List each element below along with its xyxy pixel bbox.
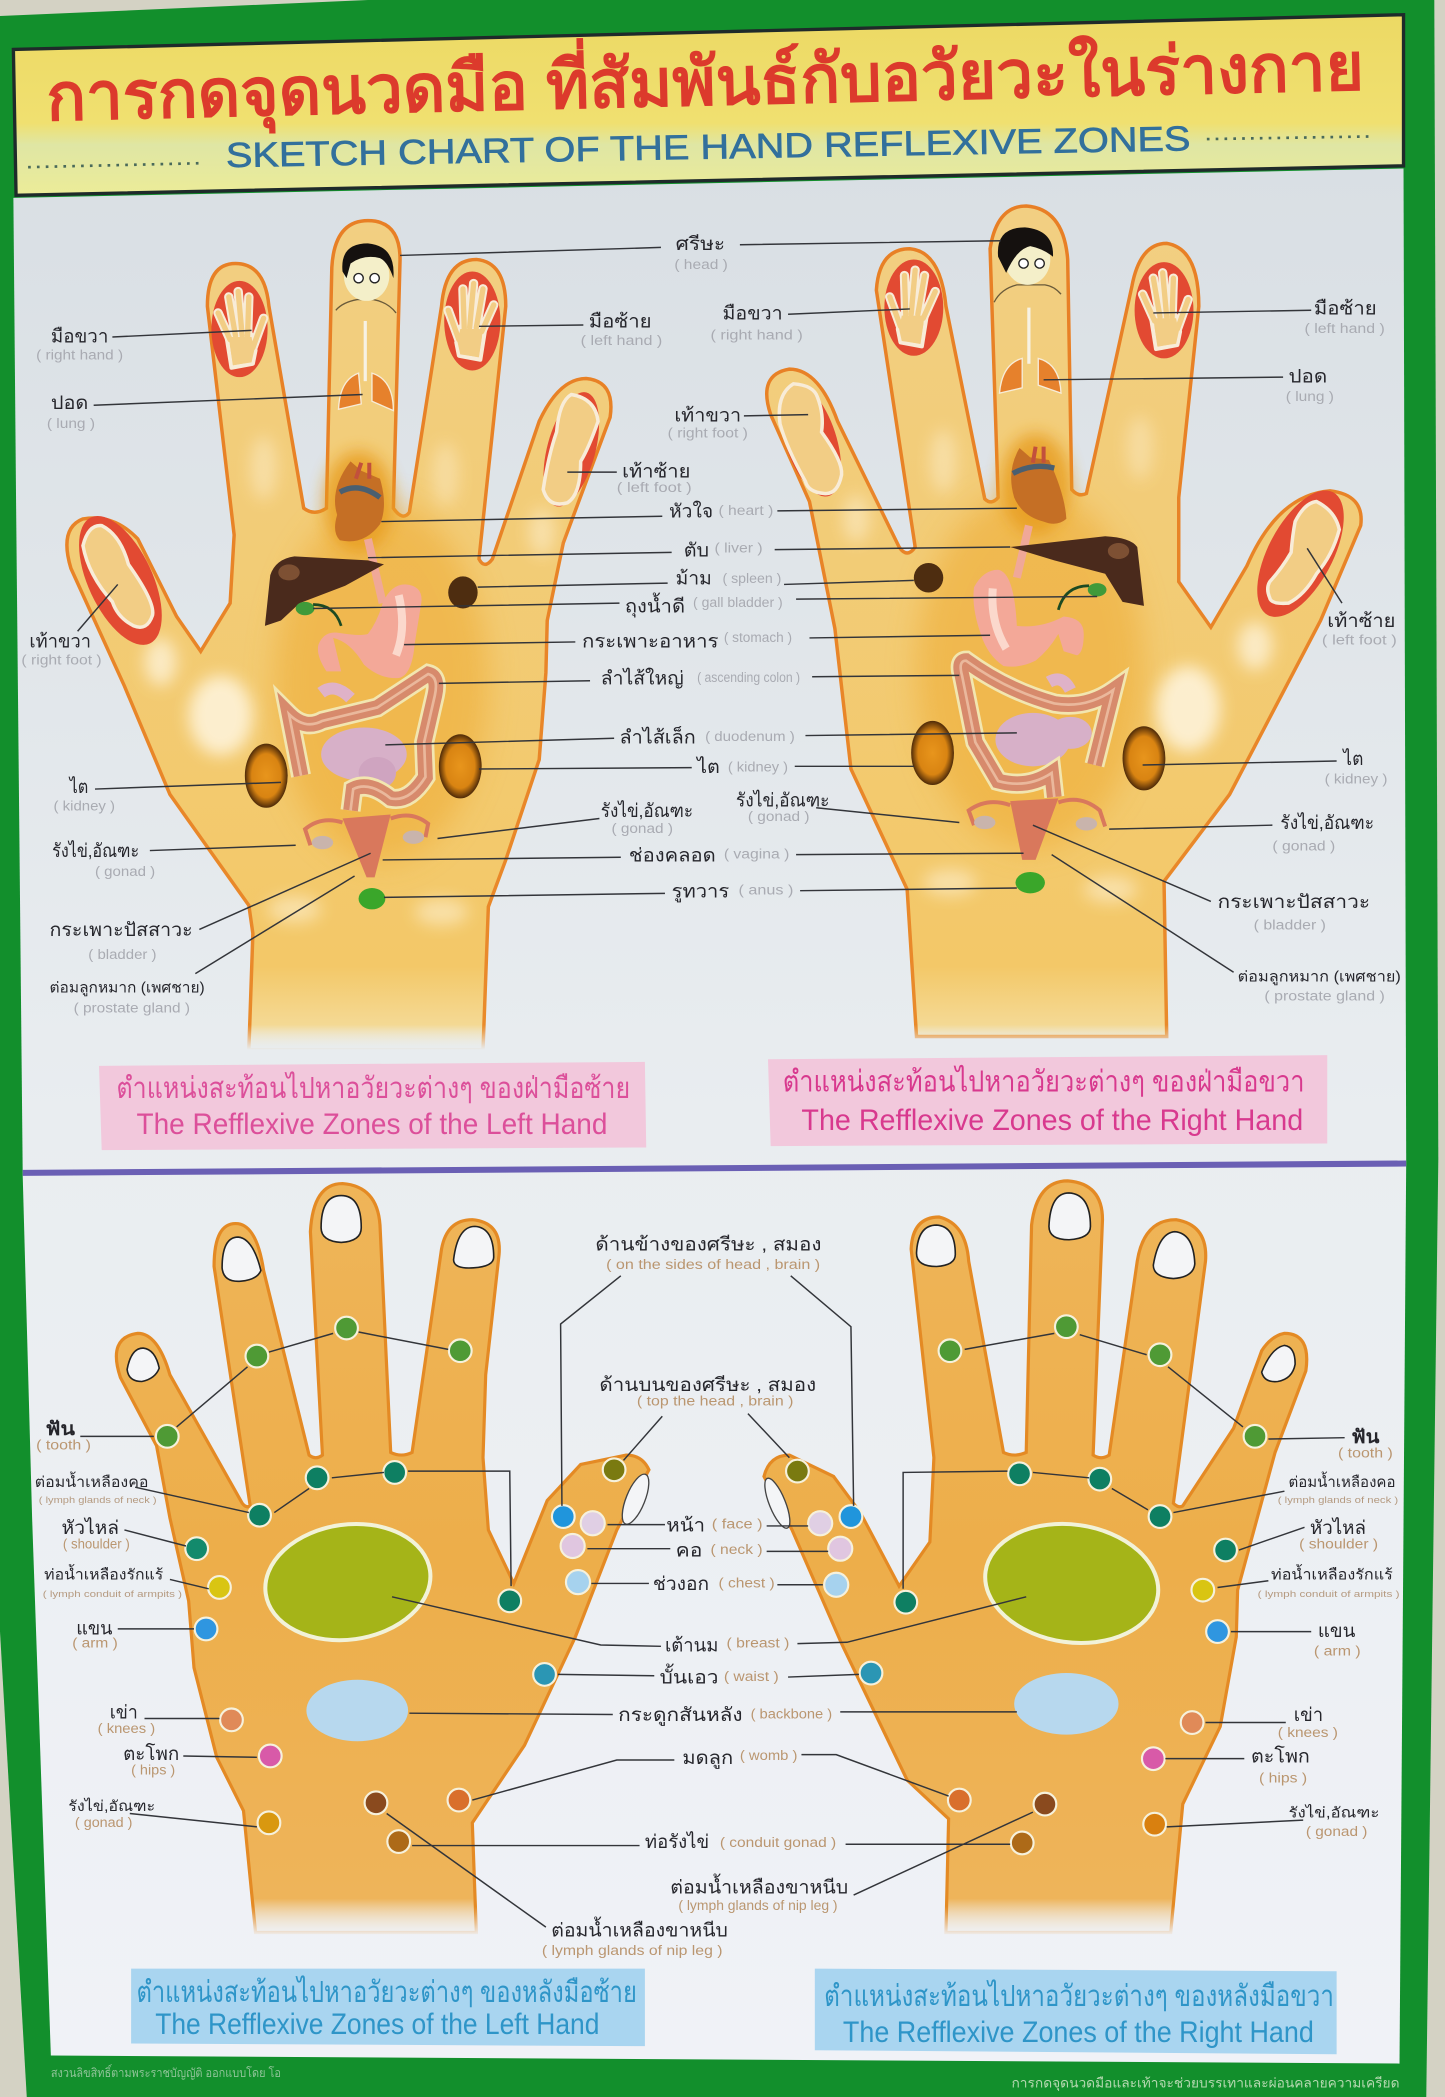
label: anus: รูทวาร <box>672 880 729 902</box>
label: knees <box>1206 1704 1338 1740</box>
label: face: ( face ) <box>712 1517 763 1532</box>
label: lymph glands of nip leg right <box>670 1812 1033 1913</box>
label: tooth: ( tooth ) <box>36 1438 91 1453</box>
label: face: หน้า <box>666 1514 705 1535</box>
label: gonad <box>52 840 296 879</box>
label: kidney: ไต <box>68 776 88 797</box>
leader lines and labels: top right hand <box>710 297 1401 1003</box>
purple divider <box>23 1164 1406 1173</box>
label: gall bladder: ( gall bladder ) <box>693 595 783 610</box>
label: gonad right: ( gonad ) <box>1272 839 1335 854</box>
label: right foot lower: เท้าขวา <box>29 630 91 651</box>
label: breast <box>392 1597 1026 1656</box>
label: lung: ปอด <box>51 392 88 413</box>
zone: breast <box>258 1514 438 1651</box>
label: lymph conduit of armpits <box>1218 1563 1400 1599</box>
label: vagina: ช่องคลอด <box>629 844 716 865</box>
label: gonad: ( gonad ) <box>75 1815 132 1830</box>
label: liver <box>368 539 1010 560</box>
label: gonad center: ( gonad ) <box>611 821 673 836</box>
label: gonad center <box>438 800 693 839</box>
icon: liver <box>1010 536 1144 606</box>
reflex points <box>156 1317 625 1853</box>
label: anus <box>384 880 1017 902</box>
label: conduit gonad <box>412 1831 1010 1852</box>
label: stomach: กระเพาะอาหาร <box>582 630 718 651</box>
icon: right foot on little finger <box>62 504 179 657</box>
label: bladder: กระเพาะปัสสาวะ <box>50 919 193 940</box>
label: gall bladder: ถุงน้ำดี <box>625 593 685 619</box>
icon: anus <box>359 888 385 909</box>
label: lymph conduit of armpits <box>43 1563 209 1599</box>
label: shoulder <box>62 1517 186 1552</box>
label: top of head, brain: ด้านบนของศรีษะ , สมอง <box>599 1374 816 1395</box>
label: prostate gland: ( prostate gland ) <box>1264 988 1385 1003</box>
label: neck <box>587 1540 828 1561</box>
label: left foot: เท้าซ้าย <box>622 460 690 481</box>
label: lymph glands of neck: ต่อมน้ำเหลืองคอ <box>35 1471 149 1491</box>
label: liver: ( liver ) <box>714 540 763 555</box>
icon: small intestine <box>321 688 407 789</box>
icon: gall bladder <box>1058 583 1106 610</box>
label: kidney: ( kidney ) <box>1325 772 1387 787</box>
label: tooth <box>36 1332 448 1453</box>
center labels between top hands <box>313 233 1097 902</box>
label: prostate gland: ( prostate gland ) <box>74 1000 190 1015</box>
icon: boy head <box>994 227 1061 364</box>
label: right hand <box>710 303 910 343</box>
icon: spleen <box>914 563 943 592</box>
label: lung <box>47 392 363 431</box>
label: gonad right: รังไข่,อัณฑะ <box>1280 812 1374 833</box>
label: knees <box>98 1702 219 1736</box>
label: left hand: มือซ้าย <box>589 311 652 332</box>
label: conduit gonad: ท่อรังไข่ <box>645 1831 709 1852</box>
label: knees: เข่า <box>110 1702 138 1723</box>
dotted rule right <box>1207 136 1374 139</box>
label: left foot <box>1307 548 1397 648</box>
hand: top right palm with organs <box>767 206 1362 1036</box>
label: duodenum: ลำไส้เล็ก <box>619 725 696 748</box>
label: breast: ( breast ) <box>727 1636 789 1651</box>
icon: uterus and ovaries <box>305 814 428 877</box>
label: lung: ( lung ) <box>1286 389 1334 404</box>
label: right hand: ( right hand ) <box>36 348 123 363</box>
label: ascending colon <box>439 668 959 690</box>
label: waist <box>558 1664 859 1688</box>
label: tooth <box>965 1333 1393 1461</box>
caption: right back of hand <box>815 1969 1337 2054</box>
label: left hand: ( left hand ) <box>1305 321 1385 336</box>
label: vagina: ( vagina ) <box>724 847 789 862</box>
footer note left: สงวนลิขสิทธิ์ตามพระราชบัญญัติ ออกแบบโดย โอ <box>51 2064 281 2080</box>
label: sides of head, brain <box>561 1233 854 1506</box>
caption: right palm <box>768 1055 1327 1146</box>
label: top of head, brain: ( top the head , brain ) <box>637 1394 793 1409</box>
zone: breast <box>977 1513 1166 1654</box>
label: kidney <box>54 776 281 813</box>
icon: heart <box>1011 447 1066 524</box>
icon: left hand on index finger <box>1135 262 1193 358</box>
label: bladder: ( bladder ) <box>88 947 157 962</box>
icon: lungs <box>999 358 1061 393</box>
caption: right back of hand: The Refflexive Zones of the Right Hand <box>843 2016 1314 2049</box>
label: gonad right <box>1109 812 1374 854</box>
label: lymph conduit of armpits: ท่อน้ำเหลืองรักแร้ <box>44 1563 163 1583</box>
icon: right foot on little finger <box>768 376 853 504</box>
label: lymph glands of neck: ( lymph glands of neck ) <box>39 1495 157 1505</box>
label: lymph glands of nip leg right: ต่อมน้ำเหลืองขาหนีบ <box>670 1874 848 1898</box>
label: gonad: ( gonad ) <box>95 864 155 879</box>
label: gonad: รังไข่,อัณฑะ <box>68 1797 155 1815</box>
label: gonad left: รังไข่,อัณฑะ <box>736 789 830 810</box>
zone: backbone <box>306 1680 408 1741</box>
icon: large intestine <box>289 674 436 810</box>
label: shoulder: หัวไหล่ <box>62 1517 119 1538</box>
label: vagina <box>383 844 1024 865</box>
label: lung: ( lung ) <box>47 416 95 431</box>
icon: uterus and ovaries <box>969 798 1105 860</box>
label: chest: ( chest ) <box>718 1575 775 1590</box>
label: left foot: ( left foot ) <box>617 480 692 495</box>
label: arm <box>72 1617 194 1651</box>
label: hips: ตะโพก <box>123 1743 179 1764</box>
label: gonad <box>68 1797 257 1830</box>
label: lymph glands of neck <box>903 1471 1398 1589</box>
label: left hand: มือซ้าย <box>1314 297 1377 318</box>
leader lines and labels: bottom right hand <box>903 1333 1400 1839</box>
label: head <box>400 233 1001 272</box>
caption: left palm <box>99 1062 646 1150</box>
icon: right hand on ring finger <box>884 259 943 356</box>
label: lung <box>1044 365 1334 404</box>
label: tooth: ( tooth ) <box>1338 1446 1393 1461</box>
label: backbone <box>409 1704 1017 1726</box>
label: neck: ( neck ) <box>710 1542 763 1557</box>
caption: right palm: The Refflexive Zones of the Right Hand <box>801 1104 1303 1137</box>
label: left foot <box>567 460 692 495</box>
label: right hand: มือขวา <box>722 303 783 324</box>
label: left hand <box>1153 297 1385 336</box>
icon: small intestine <box>995 679 1092 766</box>
label: lymph conduit of armpits: ( lymph conduit of armpits ) <box>1258 1589 1400 1599</box>
icon: kidneys <box>245 734 482 808</box>
label: left hand <box>479 311 662 348</box>
label: womb <box>472 1747 949 1800</box>
label: lymph conduit of armpits: ( lymph conduit of armpits ) <box>43 1589 182 1599</box>
label: lymph glands of nip leg left: ( lymph glands of nip leg ) <box>542 1943 722 1958</box>
label: shoulder: หัวไหล่ <box>1310 1517 1366 1538</box>
label: shoulder: ( shoulder ) <box>63 1537 130 1552</box>
icon: left hand on index finger <box>444 271 500 370</box>
icon: liver <box>265 556 384 626</box>
label: knees: ( knees ) <box>98 1721 155 1736</box>
label: breast: เต้านม <box>665 1635 718 1656</box>
label: lymph glands of nip leg left: ต่อมน้ำเหลืองขาหนีบ <box>551 1917 728 1941</box>
icon: esophagus and stomach <box>318 539 422 678</box>
dotted rule left <box>28 163 203 167</box>
title: Thai: การกดจุดนวดมือ ที่สัมพันธ์กับอวัยวะในร่างกาย <box>45 19 1365 139</box>
label: bladder: ( bladder ) <box>1254 917 1326 932</box>
caption: left back of hand <box>131 1969 645 2046</box>
icon: gall bladder <box>296 602 341 626</box>
label: head: ( head ) <box>674 257 728 272</box>
header banner <box>13 15 1404 195</box>
label: lymph glands of nip leg right: ( lymph glands of nip leg ) <box>678 1898 838 1913</box>
label: kidney center <box>479 756 914 777</box>
label: kidney center: ( kidney ) <box>728 760 788 775</box>
label: kidney center: ไต <box>695 756 720 777</box>
center labels between bottom hands <box>387 1233 1033 1958</box>
label: bladder: กระเพาะปัสสาวะ <box>1218 891 1370 912</box>
label: ascending colon: ลำไส้ใหญ่ <box>601 668 684 690</box>
label: anus: ( anus ) <box>739 883 793 898</box>
caption: right palm: ตำแหน่งสะท้อนไปหาอวัยวะต่างๆ ของฝ่ามือขวา <box>783 1064 1305 1098</box>
hand: top left palm with organs <box>62 221 611 1050</box>
label: left hand: ( left hand ) <box>581 333 662 348</box>
icon: large intestine <box>961 661 1113 797</box>
caption: left back of hand: The Refflexive Zones of the Left Hand <box>155 2008 599 2041</box>
label: heart: ( heart ) <box>718 503 773 518</box>
icon: kidneys <box>911 721 1165 790</box>
fingernails <box>127 1196 654 1528</box>
label: bladder <box>1033 825 1370 932</box>
hand: bottom right back of hand <box>760 1181 1307 1933</box>
label: kidney: ไต <box>1341 748 1363 769</box>
label: shoulder: ( shoulder ) <box>1299 1537 1378 1552</box>
label: spleen: ( spleen ) <box>722 571 781 586</box>
label: backbone: กระดูกสันหลัง <box>618 1704 743 1726</box>
label: right hand: มือขวา <box>51 325 108 346</box>
icon: anus <box>1016 872 1045 893</box>
label: hips: ตะโพก <box>1251 1746 1310 1767</box>
label: duodenum <box>385 725 1017 748</box>
label: neck: คอ <box>676 1540 702 1561</box>
caption: left palm: ตำแหน่งสะท้อนไปหาอวัยวะต่างๆ ของฝ่ามือซ้าย <box>116 1071 630 1105</box>
icon: esophagus and stomach <box>973 526 1084 667</box>
label: duodenum: ( duodenum ) <box>705 729 795 744</box>
leader lines and labels: bottom left hand <box>35 1332 511 1830</box>
label: right foot upper: เท้าขวา <box>674 404 741 425</box>
label: womb: ( womb ) <box>740 1748 797 1763</box>
label: lymph conduit of armpits: ท่อน้ำเหลืองรักแร้ <box>1271 1563 1393 1583</box>
label: prostate gland <box>50 876 355 1015</box>
reflex points <box>786 1315 1266 1854</box>
label: head: ศรีษะ <box>676 233 725 254</box>
label: arm: แขน <box>76 1617 113 1638</box>
label: gonad left <box>736 789 959 824</box>
label: gall bladder <box>313 593 1097 619</box>
label: ascending colon: ( ascending colon ) <box>697 670 800 685</box>
label: face <box>607 1514 808 1535</box>
label: bladder <box>50 853 371 962</box>
label: right foot upper <box>668 404 808 440</box>
label: arm: ( arm ) <box>1314 1644 1361 1659</box>
label: prostate gland: ต่อมลูกหมาก (เพศชาย) <box>50 980 205 996</box>
fingernails <box>760 1193 1295 1531</box>
label: tooth: ฟัน <box>45 1418 75 1439</box>
label: hips: ( hips ) <box>131 1763 175 1778</box>
label: arm: ( arm ) <box>72 1636 118 1651</box>
label: waist: ( waist ) <box>724 1669 779 1684</box>
label: gonad: รังไข่,อัณฑะ <box>1288 1803 1379 1821</box>
icon: spleen <box>448 576 478 609</box>
label: arm <box>1231 1620 1361 1659</box>
label: conduit gonad: ( conduit gonad ) <box>720 1835 836 1850</box>
caption: left palm: The Refflexive Zones of the Left Hand <box>136 1108 607 1141</box>
label: tooth: ฟัน <box>1351 1426 1380 1447</box>
label: backbone: ( backbone ) <box>751 1707 832 1722</box>
label: arm: แขน <box>1318 1620 1356 1641</box>
label: top of head, brain <box>599 1374 816 1460</box>
label: sides of head, brain: ( on the sides of head , brain ) <box>606 1257 820 1272</box>
label: lymph glands of neck: ( lymph glands of neck ) <box>1278 1495 1398 1505</box>
label: left foot: ( left foot ) <box>1322 633 1397 648</box>
label: lung: ปอด <box>1288 365 1327 386</box>
icon: boy head <box>336 243 396 381</box>
label: gonad <box>1167 1803 1379 1839</box>
label: liver: ตับ <box>684 539 709 560</box>
label: prostate gland: ต่อมลูกหมาก (เพศชาย) <box>1238 970 1401 986</box>
label: spleen: ม้าม <box>676 567 712 588</box>
label: kidney <box>1143 748 1387 787</box>
subtitle: English: SKETCH CHART OF THE HAND REFLEXIVE ZONES <box>226 120 1191 175</box>
label: right foot lower: ( right foot ) <box>21 653 102 668</box>
label: knees: ( knees ) <box>1278 1725 1338 1740</box>
label: heart: หัวใจ <box>669 501 713 522</box>
label: chest <box>591 1573 823 1594</box>
label: gonad: ( gonad ) <box>1306 1824 1367 1839</box>
label: gonad: รังไข่,อัณฑะ <box>52 840 139 861</box>
label: stomach: ( stomach ) <box>724 630 792 645</box>
label: heart <box>381 501 1017 522</box>
label: waist: บั้นเอว <box>660 1664 718 1688</box>
label: kidney: ( kidney ) <box>54 798 115 813</box>
caption: left back of hand: ตำแหน่งสะท้อนไปหาอวัยวะต่างๆ ของหลังมือซ้าย <box>136 1975 637 2009</box>
icon: lungs <box>339 373 393 411</box>
label: right foot lower <box>21 584 118 668</box>
label: knees: เข่า <box>1294 1704 1323 1725</box>
label: left foot: เท้าซ้าย <box>1327 610 1395 631</box>
label: lymph glands of neck <box>35 1471 511 1586</box>
label: shoulder <box>1239 1517 1378 1552</box>
icon: left foot on thumb <box>533 386 610 512</box>
label: sides of head, brain: ด้านข้างของศรีษะ , สมอง <box>595 1233 822 1254</box>
label: gonad center: รังไข่,อัณฑะ <box>601 800 693 821</box>
label: prostate gland <box>1052 855 1401 1003</box>
leader lines and labels: top left hand <box>21 311 692 1015</box>
label: lymph glands of neck: ต่อมน้ำเหลืองคอ <box>1288 1471 1395 1491</box>
label: right hand <box>36 325 252 363</box>
label: hips: ( hips ) <box>1259 1771 1307 1786</box>
label: hips <box>123 1743 257 1778</box>
icon: right hand on ring finger <box>211 281 268 377</box>
label: hips <box>1165 1746 1310 1786</box>
label: right hand: ( right hand ) <box>710 328 803 343</box>
label: spleen <box>478 567 914 588</box>
label: womb: มดลูก <box>682 1747 733 1769</box>
label: gonad left: ( gonad ) <box>748 809 809 824</box>
label: stomach <box>404 630 990 651</box>
icon: left foot on thumb <box>1239 477 1362 630</box>
label: chest: ช่วงอก <box>653 1573 709 1594</box>
label: lymph glands of nip leg left <box>387 1813 728 1958</box>
hand: bottom left back of hand <box>116 1184 654 1933</box>
footer note right: การกดจุดนวดมือและเท้าจะช่วยบรรเทาและผ่อนคลายความเครียด <box>1012 2076 1400 2092</box>
zone: backbone <box>1014 1673 1119 1735</box>
label: right foot upper: ( right foot ) <box>668 425 748 440</box>
caption: right back of hand: ตำแหน่งสะท้อนไปหาอวัยวะต่างๆ ของหลังมือขวา <box>824 1979 1334 2013</box>
icon: heart <box>335 461 384 541</box>
